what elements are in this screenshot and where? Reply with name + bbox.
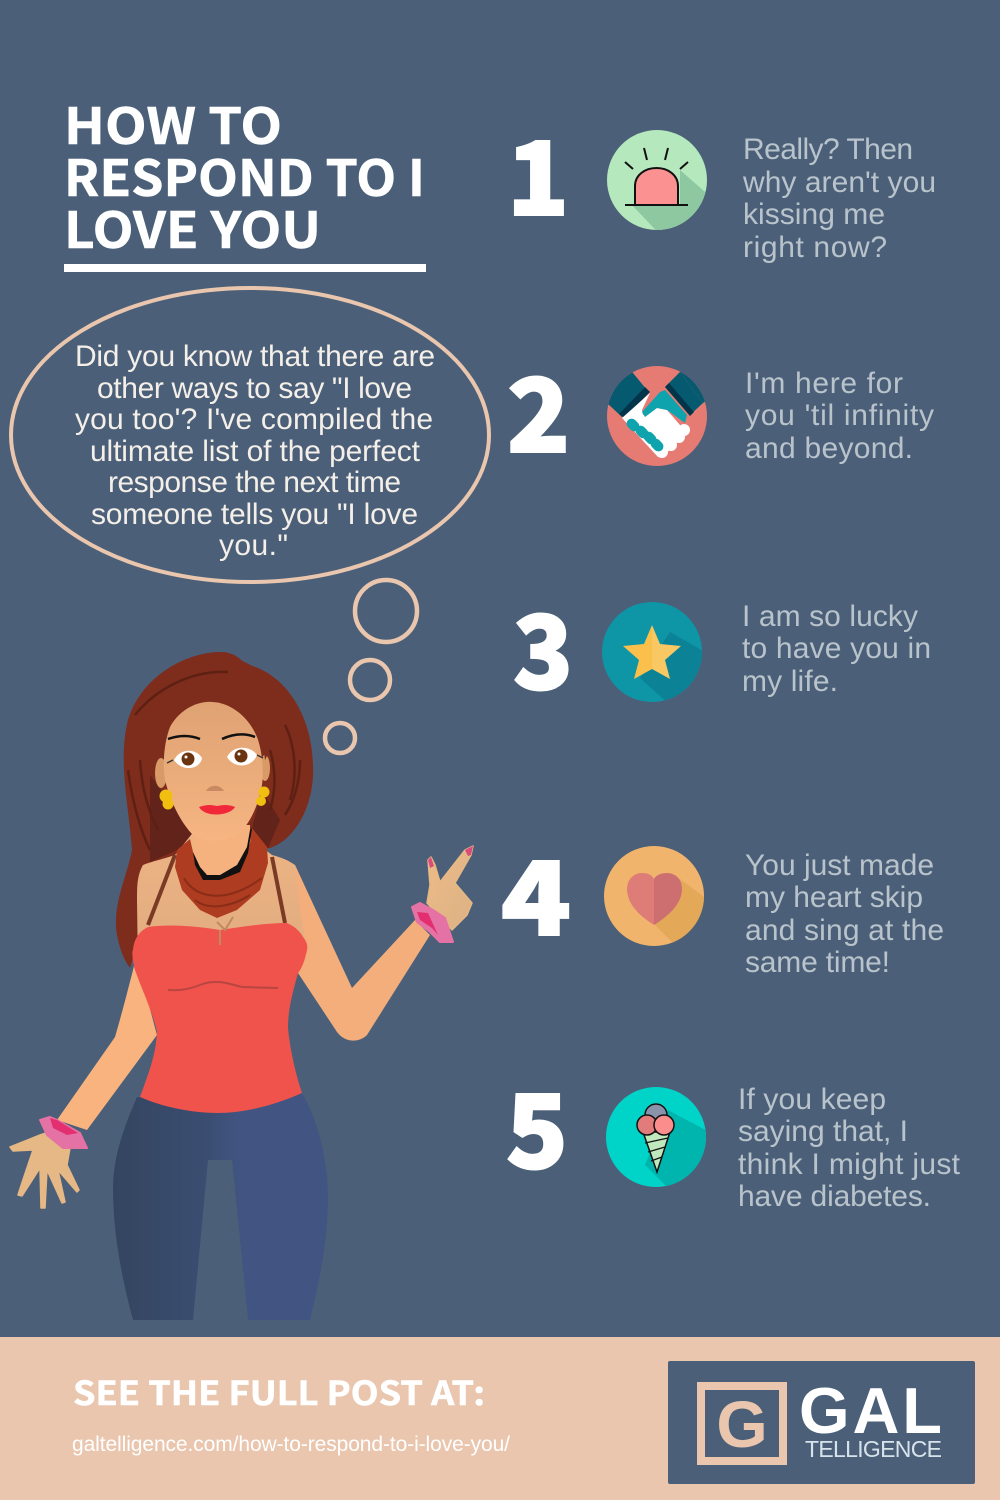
thought bubble: intro text [11, 288, 489, 582]
jeans [113, 1093, 328, 1320]
number 4: 4 [501, 818, 571, 965]
straps [148, 855, 285, 925]
step 2 text: and beyond. [745, 432, 913, 465]
step 3 text: my life. [742, 665, 838, 698]
thought bubble: intro text: someone tells you "I love [91, 498, 418, 531]
left hand [10, 1130, 79, 1208]
step 3 text: to have you in [742, 632, 931, 665]
thought bubble: intro text: Did you know that there are [75, 340, 435, 373]
title: HOW TO [64, 87, 282, 159]
step 5 text: saying that, I [738, 1115, 908, 1148]
logo [668, 1361, 975, 1484]
step 1 text [742, 133, 936, 264]
title: LOVE YOU [64, 191, 321, 263]
ears [155, 758, 167, 788]
thought bubble: intro text: response the next time [108, 466, 401, 499]
left scrunchie [40, 1117, 87, 1148]
thought bubble: intro text: ultimate list of the perfect [90, 435, 421, 468]
eyes [174, 751, 202, 768]
step 1 text: Really? Then [743, 133, 913, 166]
scarf [175, 828, 268, 918]
step 5 text: have diabetes. [738, 1180, 931, 1213]
step 2 text [745, 367, 934, 465]
footer url: galtelligence.com/how-to-respond-to-i-love-you/ [72, 1433, 510, 1456]
number 1: 1 [507, 98, 569, 245]
step 3 text [742, 600, 931, 698]
earrings [160, 790, 172, 802]
right hand [427, 846, 473, 930]
thought bubble trail [325, 580, 417, 753]
step 4 text: same time! [745, 946, 890, 979]
step 4 text [745, 849, 944, 979]
eyebrows [168, 734, 255, 739]
step 4 text: You just made [745, 849, 934, 882]
thought bubble: intro text: you." [219, 529, 288, 562]
icon: ice cream [606, 1087, 706, 1187]
step 4 text: and sing at the [745, 914, 944, 947]
step 1 text: why aren't you [742, 166, 936, 199]
step 5 text: If you keep [738, 1083, 886, 1116]
title [64, 87, 426, 272]
hair back [116, 652, 313, 968]
lips [199, 805, 235, 815]
step 2 text: you 'til infinity [745, 399, 934, 432]
icon: star [602, 602, 702, 702]
thought bubble: intro text: other ways to say "I love [97, 372, 412, 405]
step 5 text [738, 1083, 961, 1213]
right arm [295, 865, 430, 1041]
step 1 text: right now? [743, 231, 887, 264]
red top [132, 923, 307, 1113]
nose [206, 786, 224, 791]
illustration: woman pointing [10, 652, 473, 1320]
logo: G [716, 1387, 768, 1461]
icon: siren [607, 130, 707, 230]
number 5: 5 [506, 1051, 568, 1198]
logo: TELLIGENCE [805, 1436, 942, 1462]
footer heading: SEE THE FULL POST AT: [73, 1367, 485, 1415]
face [164, 702, 263, 841]
number 3: 3 [513, 572, 573, 719]
step 3 text: I am so lucky [742, 600, 918, 633]
number 2: 2 [507, 335, 570, 482]
step 2 text: I'm here for [745, 367, 903, 400]
neck [193, 825, 250, 882]
logo: GAL [799, 1374, 942, 1447]
thought bubble: intro text: you too'? I've compiled the [75, 403, 433, 436]
icon: handshake [607, 366, 707, 466]
torso skin [137, 830, 317, 1010]
necklace [217, 917, 233, 945]
icon: heart [604, 846, 704, 946]
left arm [57, 966, 157, 1130]
black collar shadow [193, 828, 252, 880]
step 4 text: my heart skip [745, 881, 923, 914]
dark hair beside neck [150, 775, 280, 862]
hair front [160, 652, 285, 760]
right scrunchie [412, 903, 453, 942]
footer band [0, 1337, 1000, 1500]
title: RESPOND TO I [64, 139, 425, 211]
step 1 text: kissing me [743, 198, 885, 231]
step 5 text: think I might just [738, 1148, 961, 1181]
